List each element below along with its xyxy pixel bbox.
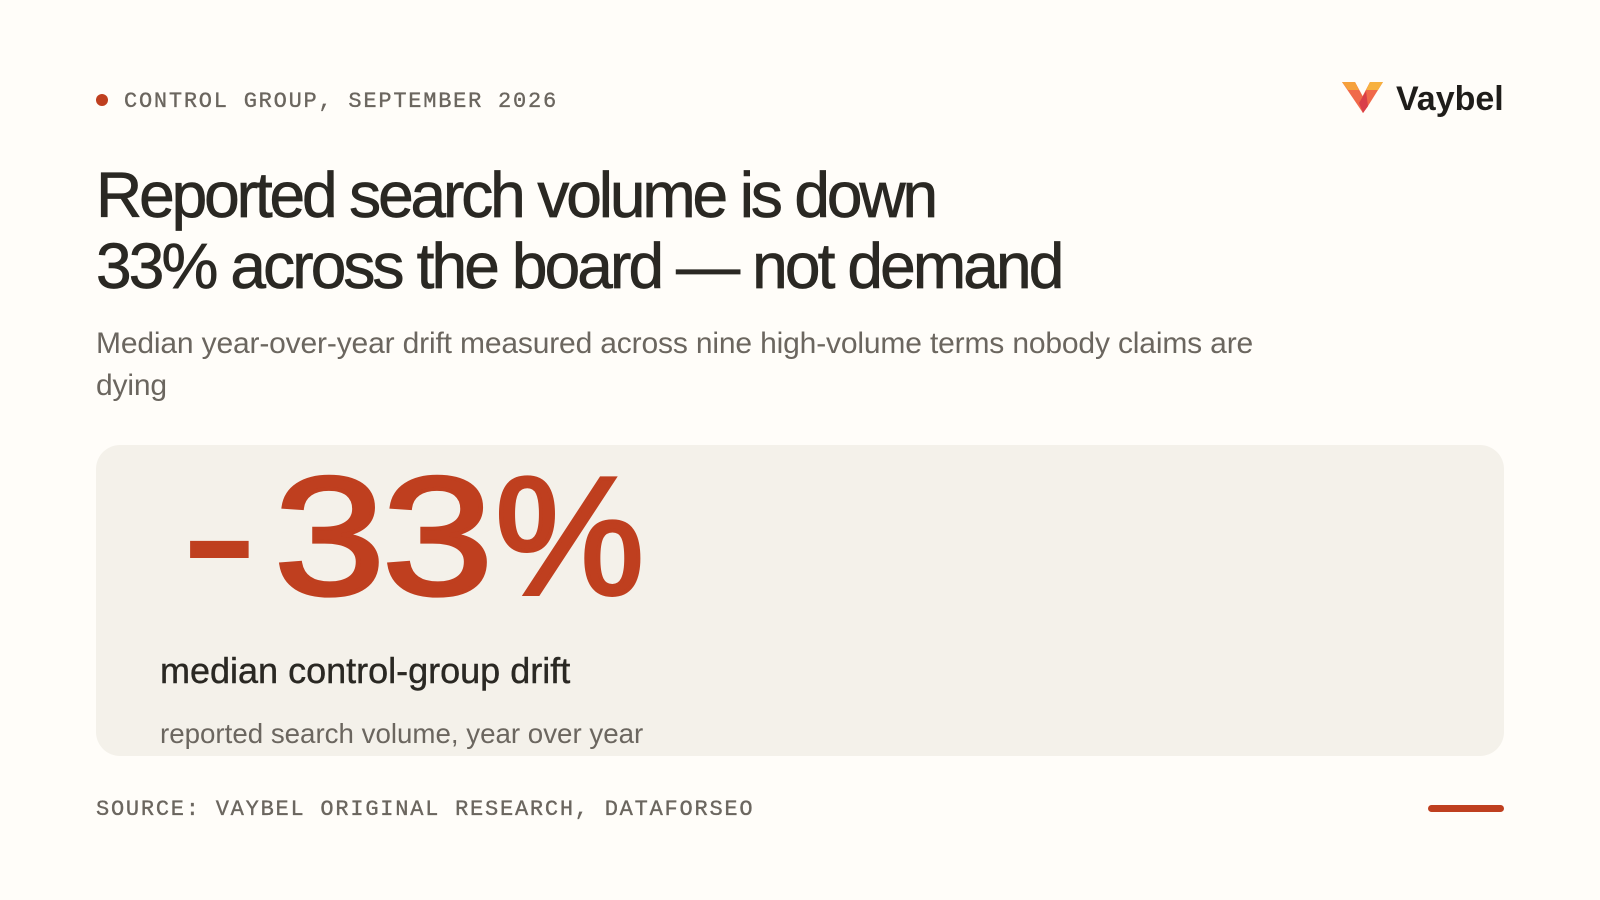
big number	[183, 445, 644, 630]
title	[96, 159, 1061, 302]
big number: %	[495, 445, 644, 630]
panel: headline stat	[96, 445, 1504, 756]
big number: 33	[274, 445, 490, 630]
stat sublabel: reported search volume, year over year	[160, 718, 643, 749]
stat label: median control-group drift	[160, 650, 570, 691]
title: 33% across the board — not demand	[96, 230, 1061, 302]
accent bar	[1428, 805, 1504, 812]
big number: -	[183, 445, 256, 630]
icon: status dot	[96, 94, 108, 106]
title: Reported search volume is down	[96, 159, 935, 231]
subtitle	[96, 327, 1253, 402]
eyebrow	[96, 89, 558, 114]
subtitle: dying	[96, 369, 167, 402]
logo	[1342, 80, 1504, 118]
source: SOURCE: VAYBEL ORIGINAL RESEARCH, DATAFORSEO	[96, 797, 754, 822]
eyebrow text: CONTROL GROUP, SEPTEMBER 2026	[124, 89, 558, 114]
wordmark: Vaybel	[1396, 80, 1504, 118]
icon: Vaybel mark	[1342, 82, 1383, 113]
subtitle: Median year-over-year drift measured across nine high-volume terms nobody claims are	[96, 327, 1253, 360]
